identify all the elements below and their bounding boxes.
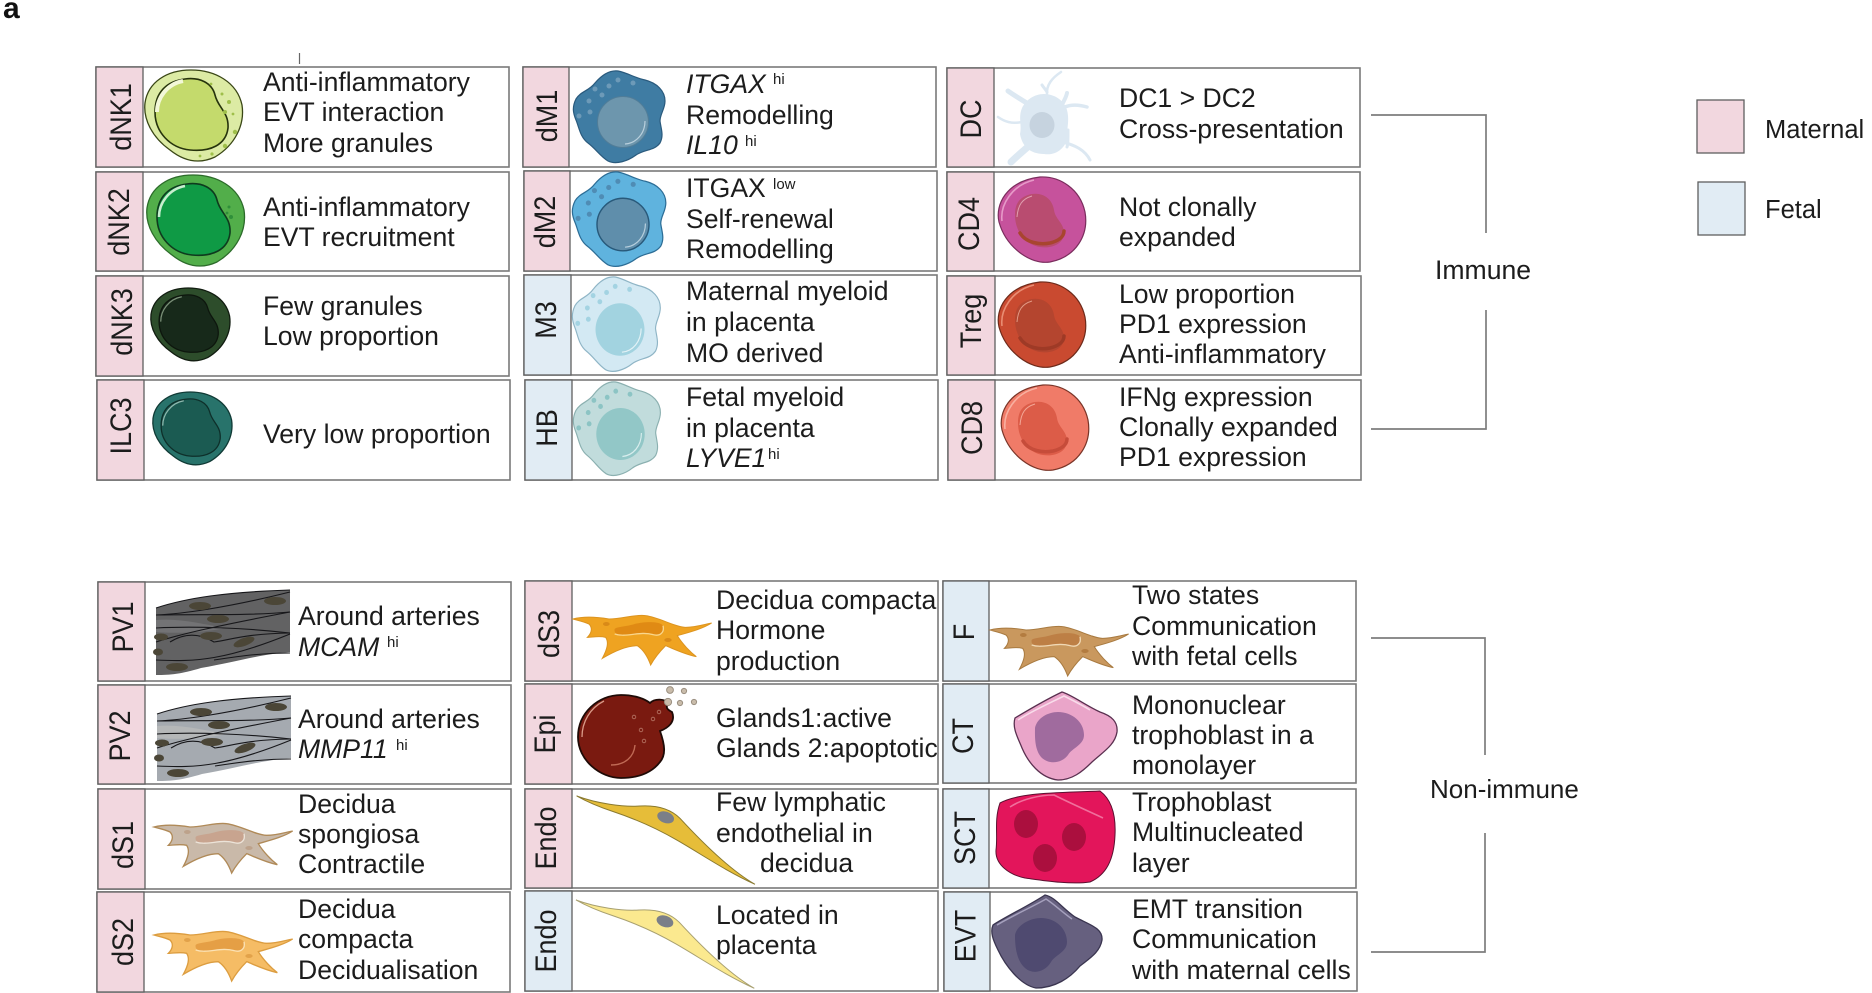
legend swatch: Maternal [1697, 100, 1744, 153]
description: SCT: layer [1132, 848, 1190, 878]
row: dS3 [525, 581, 938, 681]
label: EVT fetal: EVT [950, 910, 982, 962]
description: dS2: compacta [298, 924, 414, 954]
description: Endo fetal: Located in [716, 900, 839, 930]
card box [98, 789, 511, 889]
description: Endo maternal: endothelial in [716, 818, 873, 848]
description: dNK3: Low proportion [263, 321, 439, 351]
description: dS1: Contractile [298, 849, 425, 879]
label: dNK2 maternal [96, 172, 143, 271]
card box [944, 892, 1357, 991]
description: EVT: EMT transition [1132, 894, 1303, 924]
label: Endo fetal: Endo [530, 909, 562, 973]
icon: ILC3 cell [153, 392, 232, 465]
card box [523, 67, 936, 167]
bracket: immune [1371, 115, 1486, 429]
legend label: Maternal: Maternal [1765, 116, 1864, 144]
description: PV1: hi [387, 634, 399, 651]
legend [1697, 100, 1864, 235]
description: dS1: Decidua [298, 789, 396, 819]
card box [96, 67, 509, 167]
icon: extravillous trophoblast [992, 895, 1102, 988]
description: F: Two states [1132, 580, 1259, 610]
description: dNK3: Few granules [263, 291, 423, 321]
card box [524, 171, 937, 271]
row: PV2 [98, 685, 511, 784]
row: ILC3 [97, 380, 510, 480]
icon: DC dendritic cell [998, 72, 1090, 162]
description: dS3: production [716, 646, 840, 676]
icon: light perivascular muscle fibres [154, 696, 291, 781]
icon: dM1 macrophage [573, 71, 665, 163]
label: ILC3 maternal [97, 380, 144, 480]
label: CT fetal: CT [947, 718, 979, 754]
card box [943, 789, 1356, 888]
label: Endo maternal [525, 789, 572, 888]
description: dM2: low [773, 176, 796, 193]
row: Endo fetal [525, 891, 938, 991]
description: HB: Fetal myeloid [686, 382, 844, 412]
description: SCT: Trophoblast [1132, 787, 1271, 817]
description: CD8: IFNg expression [1119, 382, 1313, 412]
icon: CD4 T cell [998, 177, 1086, 262]
description: dNK1: EVT interaction [263, 97, 444, 127]
description: M3: Maternal myeloid [686, 276, 888, 306]
row: CD8 [948, 380, 1361, 480]
description: dM2: Remodelling [686, 234, 834, 264]
label: dM2 maternal: dM2 [529, 196, 561, 248]
tick mark [298, 53, 300, 64]
card box [98, 582, 511, 681]
label: SCT fetal: SCT [949, 811, 981, 865]
label: HB fetal [525, 380, 572, 480]
description: CD8: PD1 expression [1119, 442, 1307, 472]
card box [947, 276, 1361, 375]
legend swatch: Fetal [1698, 182, 1745, 235]
icon: epithelial gland cell [578, 687, 697, 778]
card box [525, 581, 938, 681]
icon: fetal fibroblast [990, 626, 1129, 676]
label: dM1 maternal [523, 67, 569, 167]
description: dM1: IL10 [686, 130, 738, 160]
row: dM1 [523, 67, 936, 167]
card box [943, 684, 1356, 783]
description: dM2: Self-renewal [686, 204, 834, 234]
legend label: Fetal: Fetal [1765, 196, 1822, 224]
row: dM2 [524, 171, 937, 271]
description: Treg: Anti-inflammatory [1119, 339, 1327, 369]
row: SCT [943, 787, 1356, 888]
row: dNK2 [96, 172, 509, 271]
label: CD4 maternal [947, 172, 994, 271]
label: Epi maternal: Epi [529, 714, 561, 754]
label: CD8 maternal: CD8 [956, 401, 988, 455]
card box [97, 380, 510, 480]
description: dNK2: Anti-inflammatory [263, 192, 470, 222]
bracket: non-immune [1371, 638, 1485, 952]
description: dNK1: More granules [263, 128, 433, 158]
label: CT fetal [943, 684, 989, 783]
description: ILC3: Very low proportion [263, 419, 491, 449]
description: CT: trophoblast in a [1132, 720, 1314, 750]
label: dS1 maternal: dS1 [107, 821, 139, 869]
description: dS3: Hormone [716, 615, 825, 645]
row: Treg [947, 276, 1361, 375]
label: ILC3 maternal: ILC3 [105, 397, 137, 455]
label: dS2 maternal [97, 892, 144, 992]
description: CT: monolayer [1132, 750, 1256, 780]
card box [525, 789, 938, 888]
description: dNK2: EVT recruitment [263, 222, 455, 252]
description: CD4: Not clonally [1119, 192, 1256, 222]
row: dS1 [98, 789, 511, 889]
row: Endo maternal [525, 787, 938, 888]
label: PV1 maternal: PV1 [107, 601, 139, 653]
label: Endo fetal [525, 891, 572, 991]
description: Epi: Glands1:active [716, 703, 892, 733]
label: M3 fetal [524, 275, 571, 375]
description: EVT: with maternal cells [1131, 955, 1351, 985]
description: dS2: Decidualisation [298, 955, 478, 985]
description: F: with fetal cells [1131, 641, 1298, 671]
row: M3 [524, 275, 937, 375]
label: M3 fetal: M3 [530, 301, 562, 339]
card box [96, 276, 509, 376]
label: PV1 maternal [98, 582, 145, 681]
description: DC: DC1 > DC2 [1119, 83, 1256, 113]
label: HB fetal: HB [531, 409, 563, 447]
description: Endo maternal: Few lymphatic [716, 787, 886, 817]
description: HB: in placenta [686, 413, 815, 443]
label: Treg maternal [947, 276, 995, 375]
description: dM1: hi [745, 133, 757, 150]
row: dS2 [97, 892, 510, 992]
description: M3: in placenta [686, 307, 815, 337]
label: CD4 maternal: CD4 [953, 197, 985, 251]
description: Endo fetal: placenta [716, 930, 817, 960]
description: PV2: hi [396, 737, 408, 754]
label: dS2 maternal: dS2 [107, 918, 139, 966]
description: CD4: expanded [1119, 222, 1236, 252]
label: dS3 maternal [525, 581, 572, 681]
label: F fetal: F [948, 624, 980, 640]
row: CD4 [947, 172, 1360, 271]
description: dM1: Remodelling [686, 100, 834, 130]
description: EVT: Communication [1132, 924, 1317, 954]
label: DC maternal: DC [955, 100, 987, 138]
icon: HB macrophage [573, 382, 660, 475]
description: Epi: Glands 2:apoptotic [716, 733, 938, 763]
group label: Non-immune: Non-immune [1430, 774, 1579, 804]
icon: placental endothelial cell [576, 900, 754, 988]
description: dS2: Decidua [298, 894, 396, 924]
label: dNK2 maternal: dNK2 [103, 188, 135, 256]
label: dNK3 maternal: dNK3 [106, 288, 138, 356]
label: Epi maternal [525, 684, 572, 784]
label: Endo maternal: Endo [530, 806, 562, 870]
label: dNK1 maternal: dNK1 [105, 83, 137, 151]
card box [947, 172, 1360, 271]
row: DC [947, 68, 1360, 167]
description: CD8: Clonally expanded [1119, 412, 1338, 442]
icon: cytotrophoblast [1014, 692, 1117, 780]
label: dS1 maternal [98, 789, 145, 889]
icon: dM2 macrophage [572, 172, 666, 266]
description: dNK1: Anti-inflammatory [263, 67, 470, 97]
description: PV1: MCAM [298, 632, 380, 662]
card box [943, 581, 1356, 681]
icon: Treg T cell [998, 282, 1086, 367]
card box [524, 275, 937, 375]
description: HB: hi [768, 446, 780, 463]
description: PV1: Around arteries [298, 601, 480, 631]
label: F fetal [943, 581, 989, 681]
icon: lymphatic endothelial cell [577, 796, 755, 884]
description: HB: LYVE1 [686, 443, 766, 473]
icon: dS1 stromal cell [154, 823, 293, 873]
card box [525, 684, 938, 784]
label: PV2 maternal: PV2 [104, 710, 136, 762]
description: CT: Mononuclear [1132, 690, 1286, 720]
description: F: Communication [1132, 611, 1317, 641]
row: PV1 [98, 582, 511, 681]
icon: syncytiotrophoblast [996, 791, 1115, 883]
icon: dark perivascular muscle fibres [153, 590, 290, 675]
label: Treg maternal: Treg [955, 294, 987, 348]
label: PV2 maternal [98, 685, 145, 784]
label: CD8 maternal [948, 380, 995, 480]
description: dM1: ITGAX [686, 69, 767, 99]
row: HB [525, 380, 938, 480]
description: dS3: Decidua compacta [716, 585, 936, 615]
icon: dNK3 cell [151, 288, 230, 361]
label: DC maternal [947, 68, 994, 167]
card box [97, 892, 510, 992]
label: dNK1 maternal [96, 67, 143, 167]
description: Endo maternal: decidua [760, 848, 853, 878]
description: PV2: MMP11 [298, 734, 388, 764]
description: Treg: Low proportion [1119, 279, 1295, 309]
description: M3: MO derived [686, 338, 823, 368]
description: dS1: spongiosa [298, 819, 419, 849]
icon: dNK2 cell [147, 175, 245, 266]
description: Treg: PD1 expression [1119, 309, 1307, 339]
description: dM2: ITGAX [686, 173, 766, 203]
label: dNK3 maternal [96, 276, 143, 376]
icon: dS3 stromal cell [573, 615, 712, 665]
card box [98, 685, 511, 784]
row: EVT [944, 892, 1357, 991]
row: dNK3 [96, 276, 509, 376]
label: dM2 maternal [524, 171, 570, 271]
icon: dNK1 cell [145, 70, 243, 161]
label: SCT fetal [943, 789, 989, 888]
row: dNK1 [96, 67, 509, 167]
card box [525, 891, 938, 991]
icon: M3 macrophage [572, 277, 660, 371]
description: SCT: Multinucleated [1132, 817, 1303, 847]
card box [948, 380, 1361, 480]
description: dM1: hi [773, 71, 785, 88]
row: F [943, 580, 1356, 681]
label: dS3 maternal: dS3 [533, 610, 565, 658]
icon: CD8 T cell [1001, 385, 1089, 470]
icon: dS2 stromal cell [154, 931, 293, 981]
card box [947, 68, 1360, 167]
card box [525, 380, 938, 480]
label: EVT fetal [944, 892, 990, 991]
row: CT [943, 684, 1356, 783]
description: DC: Cross-presentation [1119, 114, 1344, 144]
group label: Immune: Immune [1435, 255, 1531, 285]
card box [96, 172, 509, 271]
row: Epi [525, 684, 938, 784]
description: PV2: Around arteries [298, 704, 480, 734]
label: dM1 maternal: dM1 [531, 90, 563, 142]
